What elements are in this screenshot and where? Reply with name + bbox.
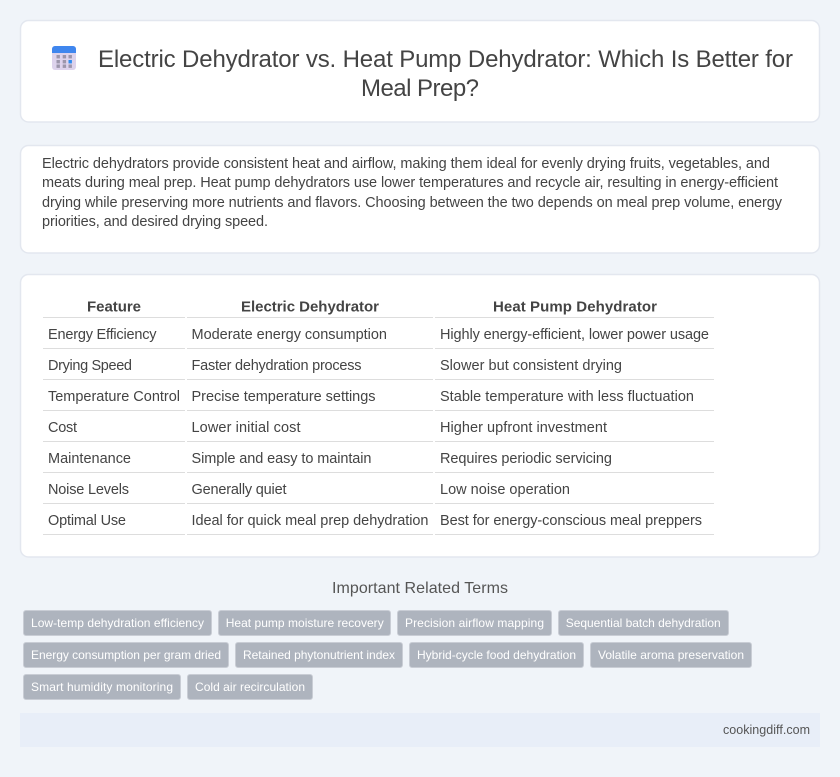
row: energy efficiency: Energy Efficiency [48,327,157,343]
panel: introduction text [20,146,820,253]
footer bar [20,713,820,747]
tag list: related terms [24,610,752,700]
row: cost: Cost [48,420,77,436]
row: drying speed: Slower but consistent drying [440,358,622,374]
table header [87,298,657,316]
row: cost: Higher upfront investment [440,420,607,436]
tag list: related terms: Heat pump moisture recovery [226,616,384,630]
row: maintenance: Simple and easy to maintain [192,451,372,467]
panel: introduction text: drying while preserving more nutrients and flavors. Choosing between the two depends on meal prep volume, energy [42,195,783,211]
row: temperature control: Stable temperature with less fluctuation [440,389,694,405]
tag list: related terms: Retained phytonutrient index [243,648,395,662]
row: noise levels: Generally quiet [192,482,286,498]
panel: introduction text: priorities, and desired drying speed. [42,214,268,230]
tag list: related terms: Smart humidity monitoring [31,680,173,694]
panel: introduction text: Electric dehydrators provide consistent heat and airflow, making them ideal for evenly drying fruits, vegetables, and [42,156,770,172]
footer bar: cookingdiff.com [723,723,810,737]
row: maintenance: Requires periodic servicing [440,451,612,467]
panel: introduction text: meats during meal prep. Heat pump dehydrators use lower temperatures and recycle air, resulting in energy-efficient [42,175,778,191]
row: energy efficiency [48,327,709,343]
row: drying speed [48,358,622,374]
row: energy efficiency: Highly energy-efficient, lower power usage [440,327,709,343]
row: temperature control [48,389,694,405]
row: maintenance: Maintenance [48,451,131,467]
heading: related terms: Important Related Terms [332,580,508,597]
row: drying speed: Drying Speed [48,358,132,374]
tag list: related terms: Low-temp dehydration efficiency [31,616,204,630]
row: cost: Lower initial cost [192,420,300,436]
tag list: related terms: Hybrid-cycle food dehydration [417,648,576,662]
row: temperature control: Temperature Control [48,389,180,405]
tag list: related terms: Volatile aroma preservation [598,648,744,662]
panel: title card [20,20,820,122]
tag list: related terms: Energy consumption per gram dried [31,648,221,662]
row: temperature control: Precise temperature settings [192,389,376,405]
table header: Heat Pump Dehydrator [493,298,657,316]
title [98,46,793,102]
title: Meal Prep? [361,75,479,102]
icon: calendar grid [52,46,76,70]
table header: Electric Dehydrator [241,298,379,316]
row: optimal use: Best for energy-conscious meal preppers [440,513,702,529]
row: noise levels: Low noise operation [440,482,570,498]
row: cost [48,420,607,436]
row: optimal use: Optimal Use [48,513,126,529]
panel: comparison table [20,274,820,557]
tag list: related terms: Cold air recirculation [195,680,305,694]
row: noise levels: Noise Levels [48,482,129,498]
row: noise levels [48,482,570,498]
tag list: related terms: Precision airflow mapping [405,616,544,630]
row: drying speed: Faster dehydration process [192,358,362,374]
row: maintenance [48,451,612,467]
table header: Feature [87,298,141,316]
title: Electric Dehydrator vs. Heat Pump Dehydrator: Which Is Better for [98,46,793,73]
row: optimal use: Ideal for quick meal prep dehydration [192,513,428,529]
row: energy efficiency: Moderate energy consumption [192,327,387,343]
row: optimal use [48,513,702,529]
tag list: related terms: Sequential batch dehydration [566,616,721,630]
